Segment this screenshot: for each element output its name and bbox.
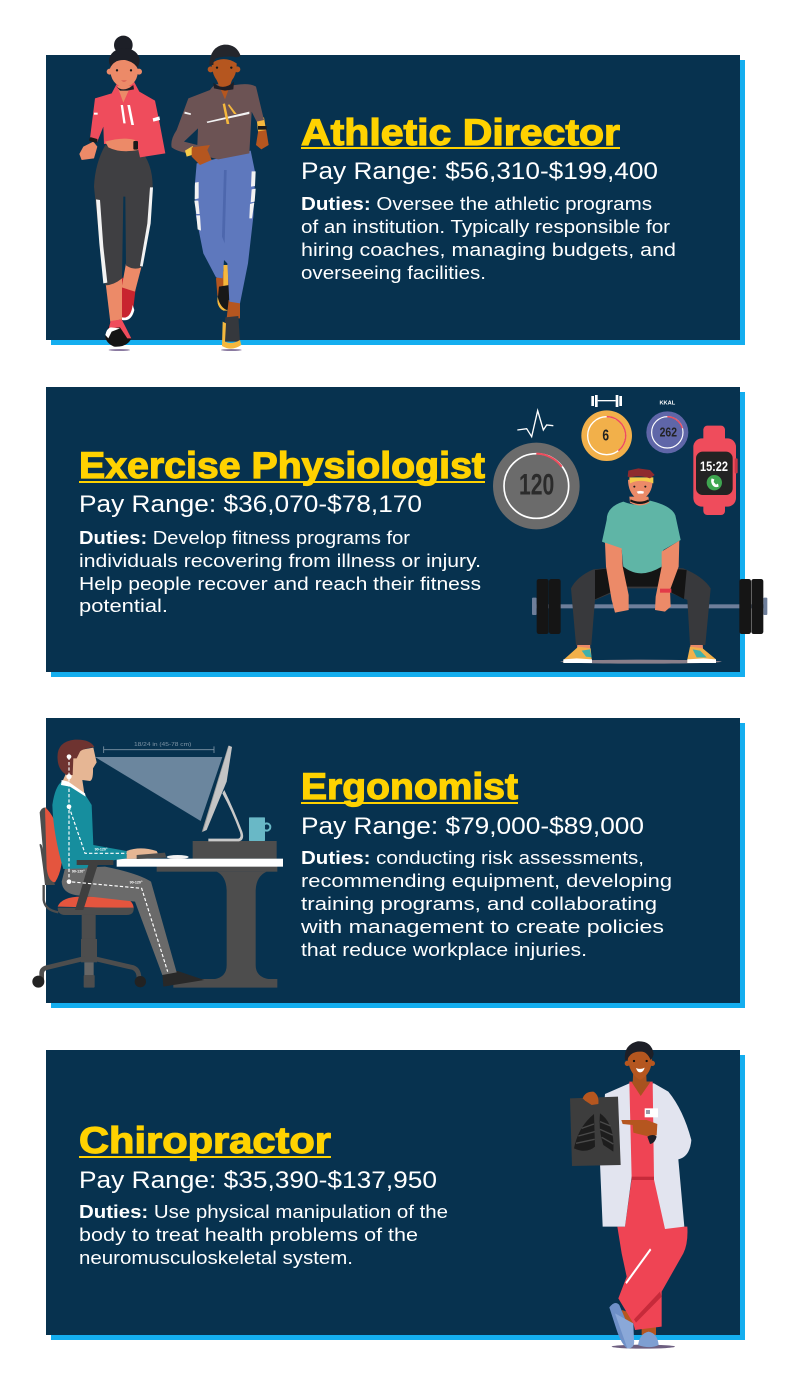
illustration: weightlifter with fitness gauges [493,395,767,664]
text block: exercise physiologist [79,445,485,616]
distance label [104,742,214,753]
duties: with management to create policies [300,916,664,937]
barbell [532,579,767,634]
heading: Chiropractor [79,1120,331,1161]
gauge: kcal 262: KKAL [659,400,676,406]
feet and slippers [609,1303,659,1348]
posture lines: 90-120° [130,880,143,884]
duties [301,193,676,283]
posture lines: 90-120° [72,869,85,873]
posture lines [66,754,168,972]
icon: heart rate line [517,411,553,437]
duties: Duties: Use physical manipulation of the [79,1201,448,1222]
head [625,1041,655,1091]
duties: Help people recover and reach their fitness [79,573,481,594]
x-ray film [570,1097,621,1166]
duties [79,527,481,616]
desk [157,841,277,988]
coffee mug [249,817,270,841]
duties: of an institution. Typically responsible for [301,216,670,237]
duties: recommending equipment, developing [301,870,672,891]
gauge: 6: 6 [602,428,609,445]
duties: hiring coaches, managing budgets, and [301,239,676,260]
duties: body to treat health problems of the [79,1224,418,1245]
monitor [202,746,243,841]
pay range: Pay Range: $56,310-$199,400 [301,158,658,185]
posture lines: 90-120° [95,848,108,852]
distance label: 18/24 in (45-78 cm) [134,742,191,748]
trouser details [625,1248,662,1323]
gauge: kcal 262 [646,400,688,453]
duties: Duties: conducting risk assessments, [301,847,644,868]
heading: Athletic Director [301,112,620,153]
duties: overseeing facilities. [301,262,486,283]
duties: that reduce workplace injuries. [301,939,587,960]
lab coat [600,1082,691,1229]
panel: athletic director [46,55,745,345]
desk top [117,859,283,867]
duties: potential. [79,595,168,616]
pay range: Pay Range: $36,070-$78,170 [79,491,422,518]
panel: ergonomist [46,718,745,1008]
gauge: 6 [581,410,632,461]
weightlifter [560,468,722,664]
woman jogger [79,36,165,351]
duties: training programs, and collaborating [301,893,657,914]
duties: Duties: Oversee the athletic programs [301,193,652,214]
gauge: kcal 262: 262 [660,425,677,440]
office chair [32,807,146,988]
heading: Exercise Physiologist [79,445,485,486]
seated person [52,740,204,987]
duties: individuals recovering from illness or injury. [79,550,481,571]
gauge: 120: 120 [519,469,554,502]
icon: smartwatch [693,426,738,515]
pay range: Pay Range: $35,390-$137,950 [79,1167,437,1194]
gauge: 120 [493,443,580,529]
holding hand [583,1092,598,1105]
panel: chiropractor [46,1050,745,1340]
duties [79,1201,448,1268]
text block: athletic director [301,112,676,283]
duties: neuromusculoskeletal system. [79,1247,353,1268]
viewing cone [95,757,222,821]
text block: ergonomist [300,766,672,960]
scrub trousers [617,1178,687,1330]
illustration: ergonomic desk setup [32,740,283,988]
icon: smartwatch: 15:22 [700,459,728,474]
illustration: two joggers [79,36,269,351]
pointing arm [621,1120,657,1144]
duties: Duties: Develop fitness programs for [79,527,410,548]
duties [300,847,672,960]
illustration: doctor holding x-ray [570,1041,691,1349]
text block: chiropractor [79,1120,448,1268]
pay range: Pay Range: $79,000-$89,000 [301,813,644,840]
panel: exercise physiologist [46,387,745,677]
icon: dumbbell [591,395,622,407]
heading: Ergonomist [301,766,518,807]
man jogger [171,45,269,351]
